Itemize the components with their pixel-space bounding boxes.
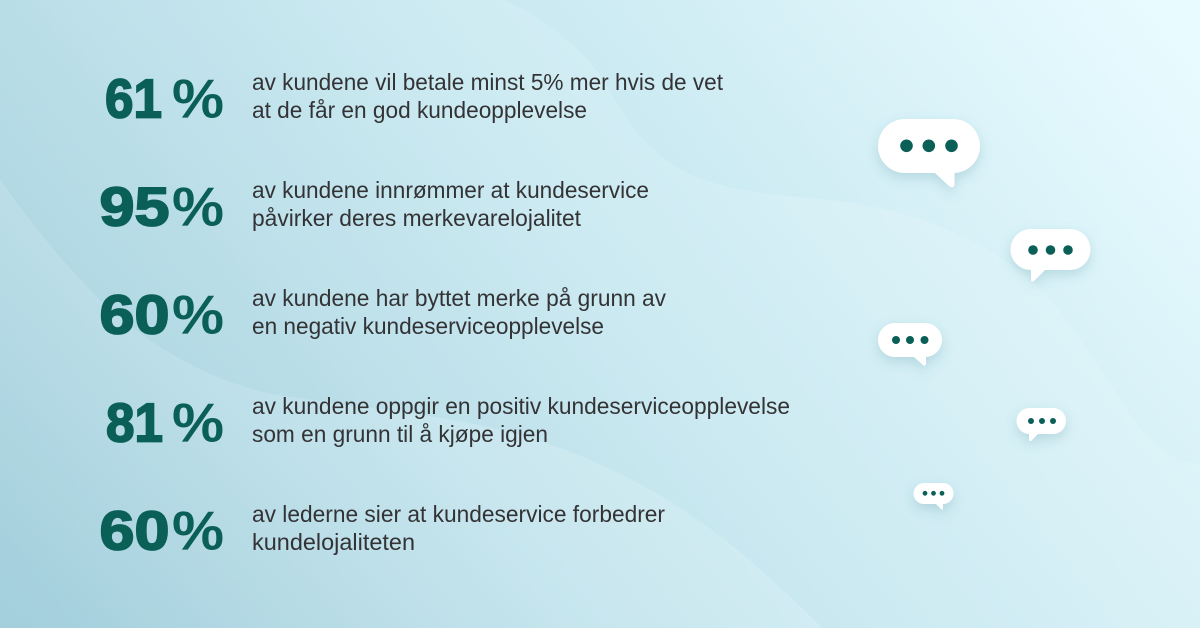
stat 2: [100, 176, 649, 238]
percentage 61%: 61: [105, 68, 162, 130]
description 1: av kundene vil betale minst 5% mer hvis de vet: [252, 69, 724, 95]
description 5: kundelojaliteten: [252, 529, 415, 555]
percentage 60%: 60: [100, 284, 170, 346]
description 1: at de får en god kundeopplevelse: [252, 97, 587, 123]
description 2: av kundene innrømmer at kundeservice: [252, 177, 649, 203]
icon: speech bubble small left: [914, 483, 954, 510]
percentage 61%: %: [172, 68, 224, 130]
percentage 95%: %: [172, 176, 224, 238]
description 3: en negativ kundeserviceopplevelse: [252, 313, 604, 339]
percentage 95%: 95: [100, 176, 170, 238]
description 4: av kundene oppgir en positiv kundeserviceopplevelse: [252, 393, 790, 419]
percentage 60%: %: [172, 500, 224, 562]
stat 5: [100, 500, 665, 562]
stat 4: [106, 392, 790, 454]
stat 1: [105, 68, 724, 130]
stat 3: [100, 284, 666, 346]
background wave: lower: [0, 179, 822, 628]
icon: speech bubble large: [878, 119, 980, 187]
percentage 60%: %: [172, 284, 224, 346]
percentage 81%: %: [172, 392, 224, 454]
icon: speech bubble small right: [1017, 408, 1066, 441]
icon: speech bubble medium right: [1010, 229, 1090, 282]
percentage 81%: 81: [106, 392, 163, 454]
description 4: som en grunn til å kjøpe igjen: [252, 421, 548, 447]
description 5: av lederne sier at kundeservice forbedrer: [252, 501, 665, 527]
percentage 60%: 60: [100, 500, 170, 562]
icon: speech bubble medium left: [878, 323, 942, 366]
description 2: påvirker deres merkevarelojalitet: [252, 205, 582, 231]
description 3: av kundene har byttet merke på grunn av: [252, 285, 666, 311]
